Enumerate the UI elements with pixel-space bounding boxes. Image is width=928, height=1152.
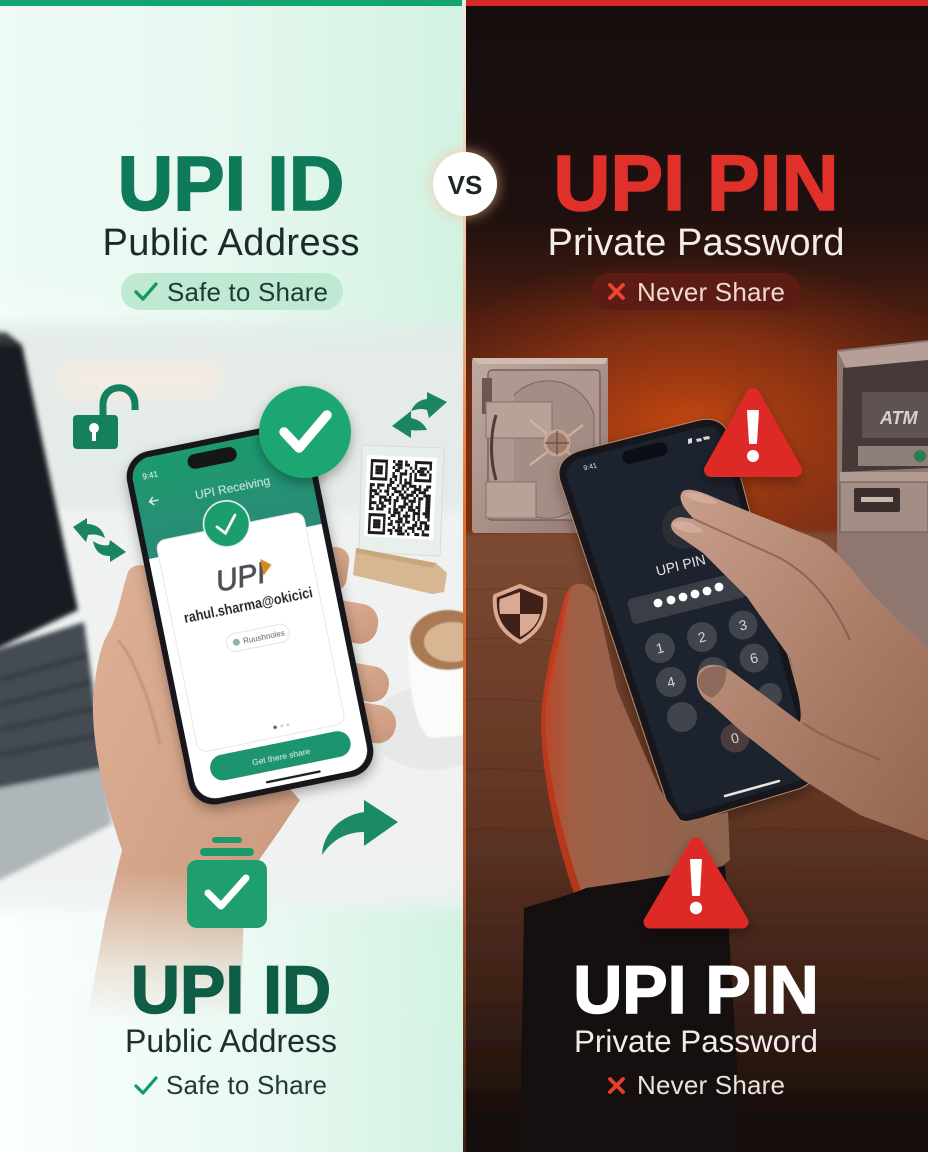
coffee cup	[376, 609, 463, 769]
phone: UPI receiving screen	[122, 419, 378, 809]
icon: swap arrows upper right	[392, 392, 447, 438]
bottom subheading: Public Address: Public Address	[125, 1023, 337, 1059]
subheading: Public Address: Public Address	[102, 222, 360, 264]
background: mint base	[0, 282, 463, 1014]
bottom label: Safe to Share	[134, 1075, 326, 1095]
icon: stacked check card	[187, 837, 267, 928]
dark jacket sleeve	[520, 866, 742, 1152]
heading: UPI PIN: UPI PIN	[553, 138, 839, 227]
panel: UPI PIN (right, dark)	[466, 98, 928, 1111]
VS badge	[433, 152, 497, 216]
icon: swap arrows left	[73, 518, 126, 562]
status icons	[688, 436, 710, 444]
bottom subheading: Private Password: Private Password	[574, 1024, 818, 1059]
top bar: red	[466, 0, 928, 6]
phone: UPI receiving screen: Get there share	[251, 746, 311, 767]
status time: 9:41	[583, 462, 598, 472]
PIN dots	[654, 583, 723, 607]
background: wooden table	[466, 530, 928, 1111]
hand tapping the PIN	[671, 490, 928, 845]
icon: open padlock	[73, 388, 135, 449]
keypad digits: 6	[748, 649, 760, 667]
subheading: Private Password: Private Password	[548, 222, 844, 264]
ATM machine	[837, 340, 928, 648]
bottom label: Safe to Share: Safe to Share	[166, 1070, 327, 1100]
badge: Never Share: Never Share	[637, 277, 785, 307]
bottom heading: UPI ID: UPI ID	[131, 952, 331, 1028]
phone: UPI receiving screen: Ruushnoles	[242, 629, 286, 646]
ATM label: ATM	[879, 408, 919, 428]
phone: UPI receiving screen: rahul.sharma@okicici	[182, 584, 314, 627]
icon: curved share arrow	[322, 800, 398, 855]
UPI PIN label: UPI PIN	[654, 551, 707, 579]
bottom label: Never Share: Never Share	[637, 1070, 785, 1100]
phone: UPI PIN entry	[563, 423, 813, 818]
QR code stand	[353, 445, 447, 594]
laptop	[0, 332, 112, 885]
home indicator	[725, 781, 779, 796]
heading: UPI ID: UPI ID	[118, 141, 344, 227]
badge: Safe to Share	[121, 273, 343, 310]
VS badge: VS	[448, 170, 482, 200]
center divider	[463, 0, 466, 1152]
hand holding the phone	[85, 545, 399, 1030]
icon: shield	[495, 586, 545, 642]
badge: Safe to Share: Safe to Share	[167, 277, 328, 307]
top bar: green	[0, 0, 462, 6]
phone: UPI receiving screen: 9:41	[142, 470, 159, 482]
keypad digits: 1	[654, 639, 666, 657]
blurred desk scene	[0, 320, 494, 910]
icon: big check badge	[259, 386, 351, 478]
background: dark wall	[466, 98, 928, 538]
vault safe	[472, 358, 608, 533]
overlay: mint fade at bottom	[85, 880, 244, 1030]
wooden base	[353, 548, 447, 594]
overlay: mint fade at top	[0, 6, 130, 347]
keypad digits: 2	[696, 628, 708, 646]
keypad digits: 0	[729, 729, 741, 747]
keypad digits: 3	[737, 616, 749, 634]
icon: warning triangle upper	[711, 395, 795, 470]
phone: UPI receiving screen: UPI	[213, 556, 268, 599]
keypad digits	[654, 616, 760, 747]
background: orange glow	[466, 268, 928, 531]
phone: UPI receiving screen: UPI Receiving	[194, 474, 271, 502]
panel: UPI ID (left, light)	[0, 0, 494, 1152]
bottom heading: UPI PIN: UPI PIN	[573, 952, 819, 1028]
icon: warning triangle lower	[650, 844, 742, 922]
QR code	[368, 460, 432, 535]
keypad	[645, 610, 782, 752]
hand holding the dark phone	[541, 584, 730, 905]
keypad digits: 4	[665, 673, 677, 691]
badge: Never Share	[591, 273, 801, 310]
fingerprint ring	[662, 505, 694, 549]
